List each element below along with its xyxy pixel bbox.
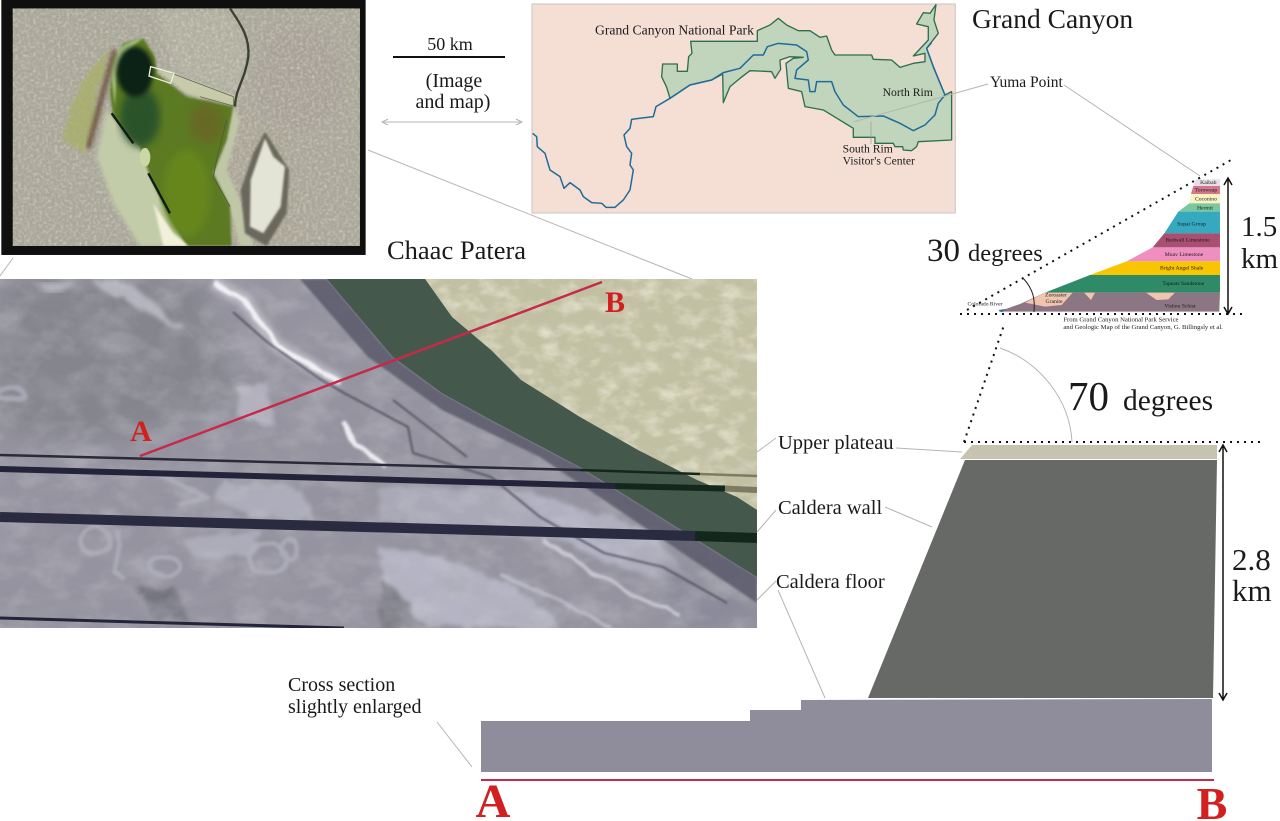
map: Grand Canyon National Park: Visitor's Center (843, 155, 915, 168)
pale rings (0, 388, 297, 580)
scale bar with caption: (Image (426, 70, 482, 92)
Grand Canyon geologic cross section: Coconino (1195, 197, 1217, 203)
park boundary (662, 5, 952, 151)
Grand Canyon geologic cross section: From Grand Canyon National Park Service (1063, 316, 1179, 323)
label: 70 degrees: 70 degrees (1068, 373, 1213, 419)
surface texture (0, 279, 757, 628)
Grand Canyon geologic cross section (967, 179, 1223, 331)
angle arcs (1000, 278, 1072, 442)
scale bar with caption (393, 34, 505, 113)
cross section: caldera wall (868, 460, 1217, 698)
label: Cross section slightly enlarged: Cross section (288, 674, 395, 696)
label: Cross section slightly enlarged: slightly enlarged (288, 696, 422, 718)
Grand Canyon geologic cross section: Colorado River (967, 302, 1003, 308)
baseline A to B (481, 779, 1214, 781)
label: Chaac Patera: Chaac Patera (387, 235, 526, 265)
profile line A to B (140, 282, 602, 456)
label: 1.5 km (1241, 211, 1278, 275)
caldera wall band (327, 279, 757, 577)
label: 2.8 km: 2.8 (1232, 542, 1271, 577)
arrow: 2.8 km height (1219, 445, 1227, 700)
Grand Canyon geologic cross section: Bright Angel Shale (1160, 265, 1204, 271)
label: Caldera floor: Caldera floor (776, 571, 885, 593)
title: Grand Canyon: Grand Canyon (972, 3, 1133, 34)
label: 2.8 km: km (1232, 573, 1272, 608)
arrow: same scale between image and map (382, 119, 522, 125)
cross section: caldera floor (481, 699, 1212, 772)
left ridge (63, 43, 110, 157)
Grand Canyon geologic cross section: Redwall Limestone (1166, 238, 1210, 244)
Grand Canyon geologic cross section: Vishnu Schist (1164, 304, 1196, 310)
Colorado River (533, 43, 945, 207)
satellite photo: Chaac Patera overview (1, 0, 366, 255)
map: Grand Canyon National Park: Grand Canyon National Park (595, 22, 754, 37)
arrow: 1.5 km height (1224, 178, 1232, 314)
label: 1.5 km: 1.5 (1241, 211, 1277, 243)
leader lines for Yuma Point and photo (0, 84, 1200, 279)
Grand Canyon geologic cross section: and Geologic Map of the Grand Canyon, G. Billingsly et al. (1063, 324, 1223, 331)
Grand Canyon geologic cross section: Toroweap (1195, 188, 1217, 194)
Grand Canyon geologic cross section: Supai Group (1177, 222, 1206, 228)
Grand Canyon geologic cross section: Zoroaster (1045, 292, 1067, 298)
label: Yuma Point: Yuma Point (990, 74, 1063, 91)
label: 30 degrees: 30 degrees (927, 233, 1043, 269)
cross section: upper plateau (960, 445, 1217, 459)
caldera floor (110, 38, 233, 246)
label: Caldera wall: Caldera wall (778, 497, 882, 519)
label: Cross section slightly enlarged (288, 674, 422, 718)
Grand Canyon geologic cross section: Muav Limestone (1165, 252, 1204, 258)
label: A on image: A (130, 415, 152, 448)
label: 1.5 km: km (1241, 243, 1278, 275)
Grand Canyon geologic cross section: Tapeats Sandstone (1162, 281, 1205, 287)
plateau surface (425, 279, 757, 514)
scale bar with caption: 50 km (427, 34, 473, 54)
label: Upper plateau: Upper plateau (778, 432, 894, 454)
leader lines for labels (437, 438, 962, 767)
map: Grand Canyon National Park: South Rim (843, 143, 893, 156)
label: 2.8 km (1232, 542, 1272, 608)
image gap stripes (0, 455, 757, 628)
image: Chaac Patera close view (0, 279, 757, 628)
map: Grand Canyon National Park: North Rim (883, 86, 933, 99)
scale bar with caption: and map) (416, 91, 490, 113)
dark fringe along caldera wall base (300, 279, 757, 603)
pale flanks (97, 110, 190, 246)
Grand Canyon geologic cross section: Kaibab (1200, 180, 1217, 186)
dotted angle lines for canyon (960, 160, 1262, 442)
label: B on image: B (605, 286, 625, 319)
Grand Canyon geologic cross section: Granite (1046, 299, 1063, 305)
Grand Canyon geologic cross section: Hermit (1197, 205, 1213, 211)
map: Grand Canyon National Park (532, 4, 955, 213)
